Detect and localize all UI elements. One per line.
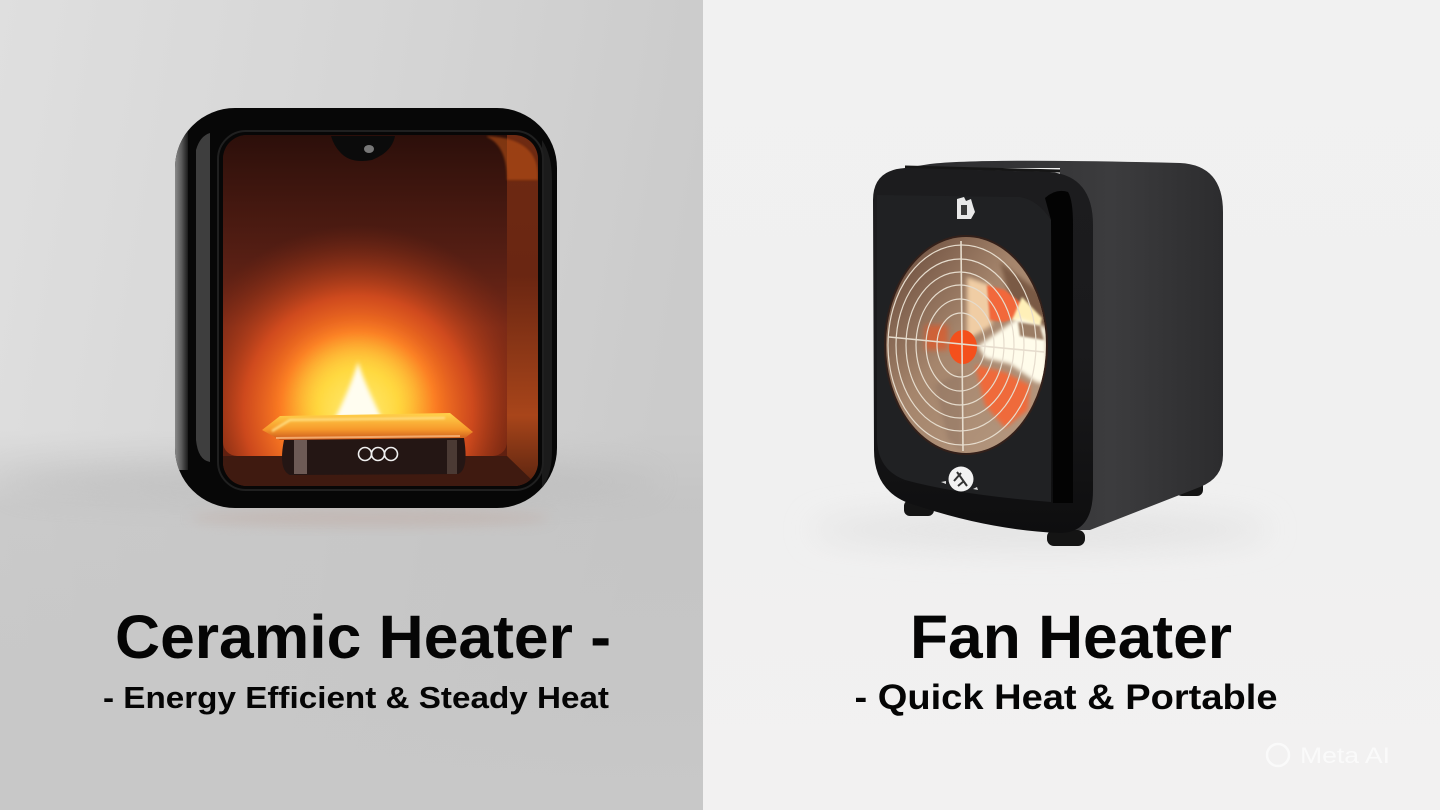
watermark: Meta AI (1267, 743, 1390, 768)
flame (303, 347, 413, 437)
feet (904, 478, 1203, 546)
top emblem (957, 197, 975, 219)
subheading: ceramic heater: - Energy Efficient & Steady Heat (103, 680, 609, 715)
tray logo rings (358, 448, 398, 460)
bottom emblem (941, 466, 978, 492)
heater interior (223, 135, 538, 486)
front inset panel (877, 195, 1051, 502)
burner tray (262, 413, 473, 475)
ceramic heater illustration (175, 108, 557, 508)
black gloss strip (1045, 191, 1073, 503)
heading: fan heater: Fan Heater (910, 603, 1232, 671)
top seam (905, 167, 1060, 171)
fan guard (880, 230, 1052, 460)
guard wires (888, 241, 1044, 451)
heat glow wedges (1000, 262, 1044, 328)
heater body shell (175, 108, 557, 508)
subheading: fan heater: - Quick Heat & Portable (854, 678, 1278, 717)
watermark: Meta AI: Meta AI (1300, 743, 1390, 768)
side panel (905, 161, 1223, 530)
panel: ceramic heater background (0, 0, 703, 810)
front shell (873, 168, 1093, 533)
heading: ceramic heater: Ceramic Heater - (115, 603, 611, 671)
fan heater illustration (873, 161, 1223, 546)
panel: fan heater background (703, 0, 1440, 810)
top sensor notch (331, 136, 395, 161)
